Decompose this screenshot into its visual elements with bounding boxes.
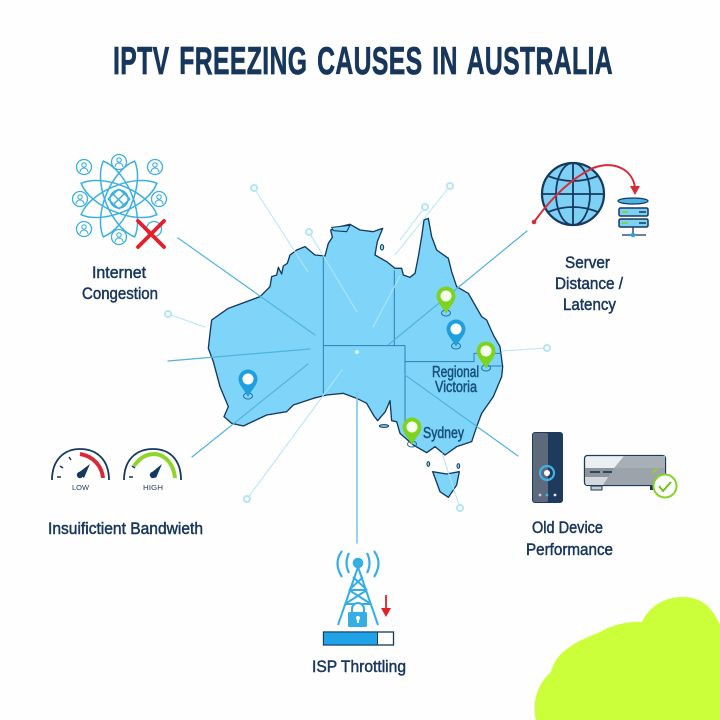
pin: green south xyxy=(402,418,422,447)
map label: Regional Victoria: Victoria xyxy=(435,379,477,396)
map label: Sydney: Sydney xyxy=(423,425,464,442)
map of Australia xyxy=(208,218,503,497)
state borders xyxy=(323,257,502,432)
label: Server Distance / Latency xyxy=(555,253,623,314)
label: Insufficient Bandwidth: Insuifictient Bandwieth xyxy=(48,519,203,538)
islands xyxy=(332,225,460,468)
pin: blue queensland xyxy=(446,320,466,349)
map label: Regional Victoria xyxy=(432,364,479,396)
pin: green north xyxy=(436,286,456,316)
label: Internet Congestion xyxy=(82,263,158,303)
device: streaming box upright xyxy=(532,432,563,503)
gauge: high: HIGH xyxy=(143,485,163,492)
label: Server Distance / Latency: Latency xyxy=(563,295,616,314)
label: ISP Throttling: ISP Throttling xyxy=(312,657,406,676)
Tasmania xyxy=(433,472,459,497)
icon: bandwidth gauges xyxy=(52,449,181,492)
gauge: low: LOW xyxy=(72,485,89,492)
connector end dots xyxy=(165,183,550,511)
mainland xyxy=(208,218,503,455)
label: Server Distance / Latency: Server xyxy=(565,253,610,272)
map label: Regional Victoria: Regional xyxy=(432,364,479,381)
label: Old Device Performance: Old Device xyxy=(532,518,603,537)
pin: green east xyxy=(476,342,496,371)
label: Old Device Performance xyxy=(526,518,613,559)
label: Internet Congestion: Congestion xyxy=(82,284,158,303)
label: Internet Congestion: Internet xyxy=(92,263,146,282)
map pins xyxy=(238,286,496,447)
icon: ISP tower xyxy=(324,551,394,645)
pin: blue west xyxy=(238,370,258,399)
label: Server Distance / Latency: Distance / xyxy=(555,274,623,293)
device: set top box xyxy=(584,456,676,498)
decorative blob bottom right xyxy=(535,597,720,720)
icon: internet congestion xyxy=(72,154,166,247)
label: Old Device Performance: Performance xyxy=(526,540,613,559)
connector lines xyxy=(168,186,547,543)
icon: server distance globe xyxy=(532,163,648,237)
icon: old devices xyxy=(532,432,676,503)
